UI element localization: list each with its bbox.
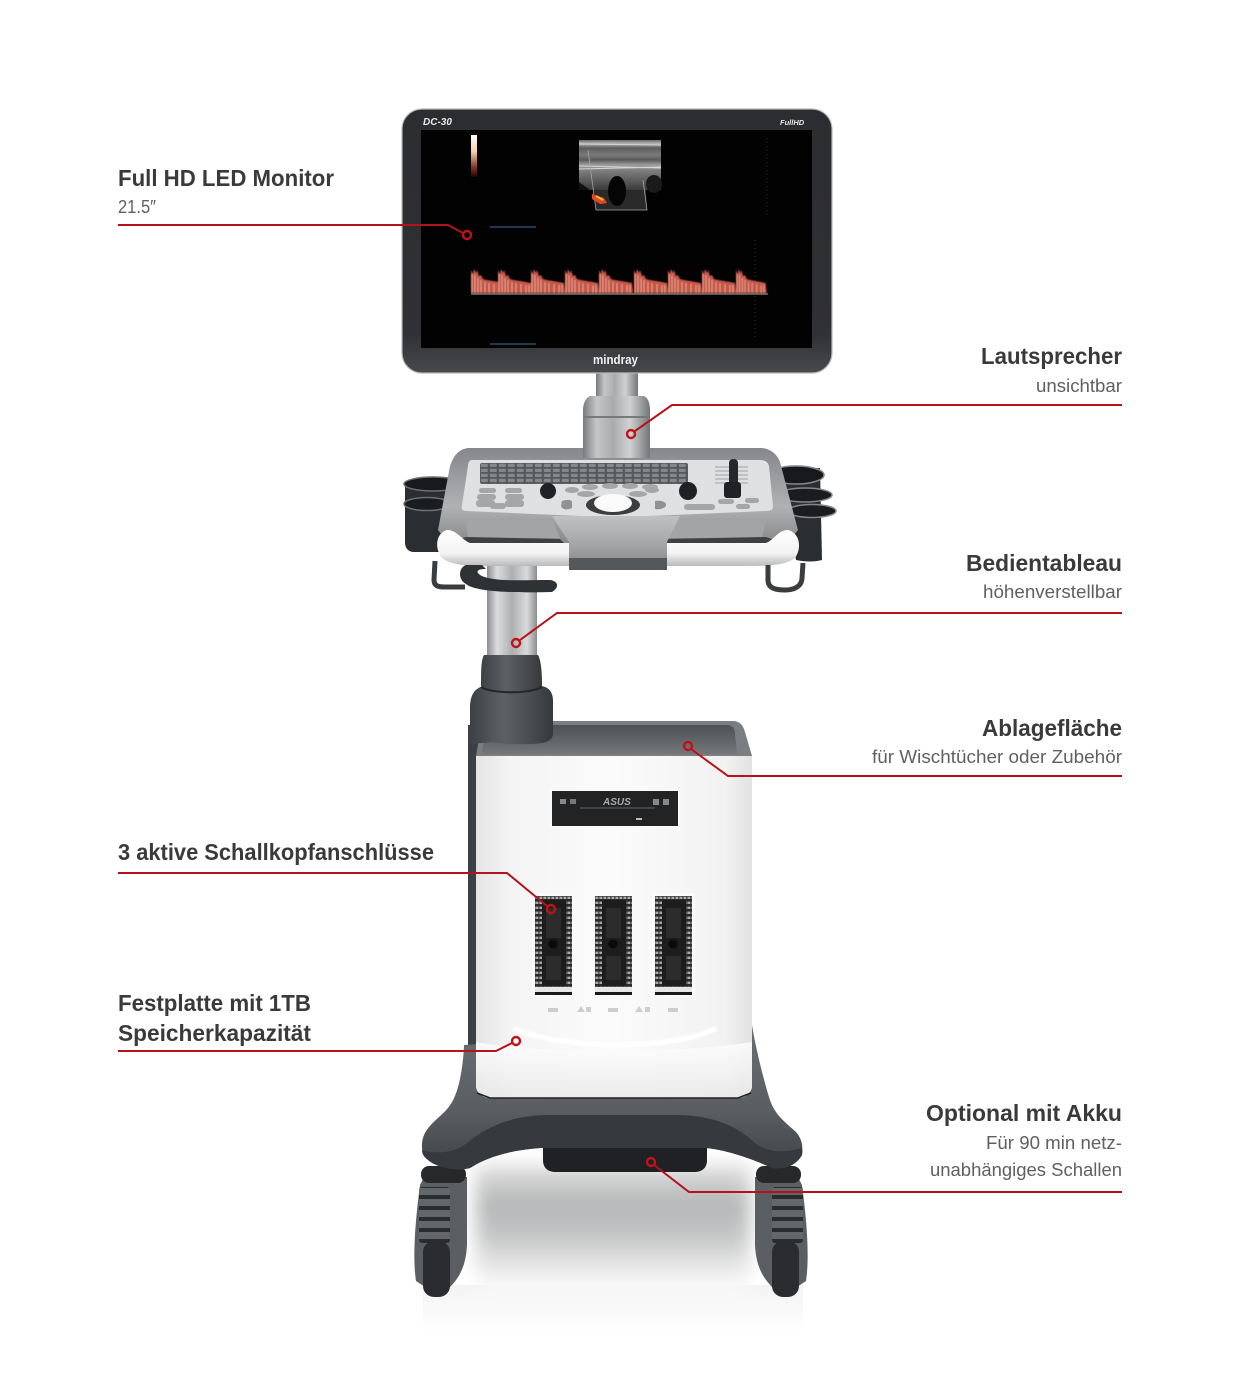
rear spine of cart (468, 725, 480, 1095)
callout: storage tray: für Wischtücher oder Zubehör (872, 747, 1122, 767)
base frame (422, 1025, 802, 1169)
callout: monitor (118, 165, 471, 239)
cabinet (476, 721, 752, 1098)
callout: monitor: 21.5″ (118, 197, 157, 217)
callout: storage tray: Ablagefläche (982, 715, 1122, 741)
colour flow spot (592, 194, 607, 204)
bezel (402, 109, 832, 373)
floor shadow (423, 1165, 803, 1335)
callout: control panel: höhenverstellbar (983, 582, 1122, 602)
probe port 3 (652, 893, 695, 997)
left caster (414, 1166, 467, 1297)
callout: probe ports (118, 839, 555, 913)
battery compartment (543, 1148, 707, 1172)
callout: monitor: Full HD LED Monitor (118, 165, 334, 191)
buttons (476, 483, 759, 510)
callout: speaker: unsichtbar (1036, 376, 1122, 396)
white housing (476, 756, 752, 1098)
sliders (715, 459, 748, 498)
callout: battery: Optional mit Akku (926, 1100, 1122, 1126)
port markings (548, 1006, 678, 1012)
blue markers (490, 227, 536, 344)
right caster (755, 1166, 808, 1297)
callout: speaker: Lautsprecher (981, 343, 1122, 369)
lower mount (470, 686, 553, 744)
callout: storage tray (684, 715, 1122, 776)
center handle block (552, 516, 680, 570)
dark collar (481, 655, 542, 692)
right cup holders (768, 466, 836, 562)
front panel relief (513, 1028, 716, 1044)
screen (421, 130, 812, 348)
speaker collar (583, 396, 650, 458)
cable hook (460, 565, 557, 592)
wheeled base (414, 1025, 808, 1297)
brand logo: mindray (593, 353, 638, 367)
callout: speaker (627, 343, 1122, 438)
callout: control panel (512, 550, 1122, 647)
monitor (402, 109, 832, 373)
callout: hard drive (118, 990, 520, 1051)
trackball (586, 495, 640, 515)
colour scale (471, 135, 477, 177)
knobs (540, 483, 556, 499)
lower housing shadow (466, 520, 766, 538)
keyboard (480, 463, 688, 484)
right hook (768, 563, 803, 590)
optical drive: ASUS (602, 797, 631, 808)
B-mode image (579, 140, 662, 210)
doppler spectrum (471, 269, 768, 294)
base arch (422, 1115, 802, 1169)
callout: battery: Für 90 min netz- (986, 1133, 1122, 1153)
probe port 1 (532, 893, 575, 997)
left handle (437, 530, 571, 566)
left cup holders (404, 477, 462, 552)
right handle (667, 530, 799, 566)
monitor stand (583, 372, 650, 458)
neck (596, 372, 638, 396)
control panel (404, 448, 836, 592)
storage tray (476, 721, 752, 756)
doppler scale ticks (755, 138, 767, 340)
callout: battery (647, 1100, 1122, 1192)
column (470, 565, 553, 744)
callout: hard drive: Festplatte mit 1TB (118, 990, 311, 1016)
metal pole (487, 565, 537, 660)
console housing (438, 448, 798, 545)
callout: control panel: Bedientableau (966, 550, 1122, 576)
callout: hard drive: Speicherkapazität (118, 1020, 311, 1046)
left hook (434, 561, 465, 587)
full hd label: FullHD (780, 118, 805, 127)
probe port 2 (592, 893, 635, 997)
optical drive (550, 789, 680, 828)
callout: battery: unabhängiges Schallen (930, 1160, 1122, 1180)
light control surface (462, 460, 773, 516)
callout: probe ports: 3 aktive Schallkopfanschlüsse (118, 839, 434, 865)
model label: DC-30 (423, 117, 452, 128)
